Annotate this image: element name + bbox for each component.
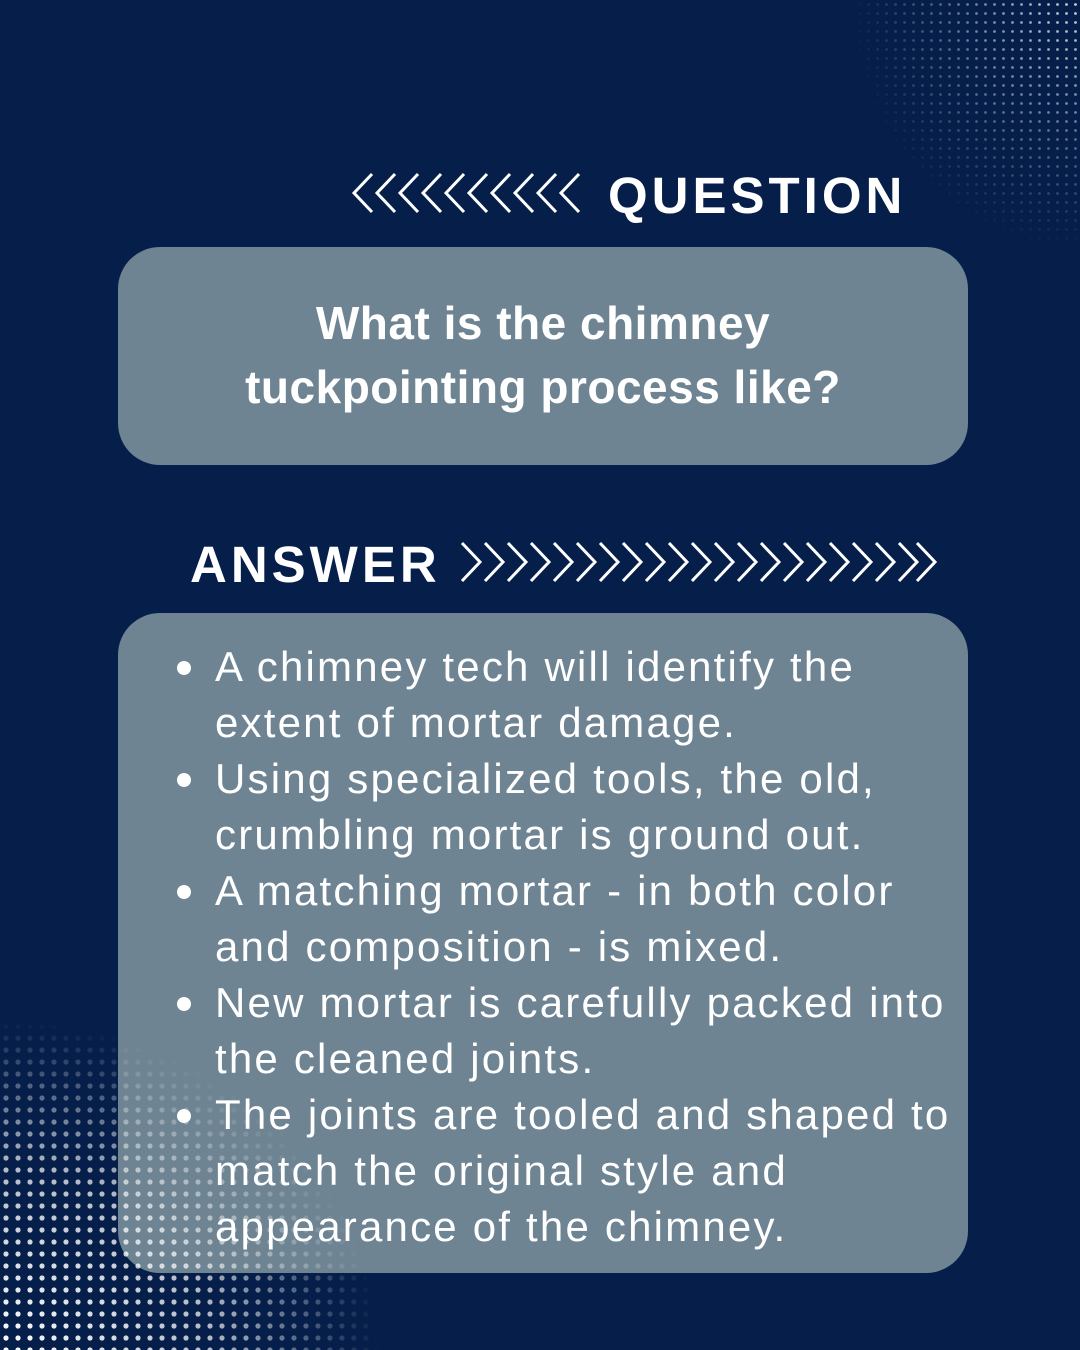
panel: question [118,247,968,465]
answer list: extent of mortar damage. [215,699,737,746]
answer list: Using specialized tools, the old, [215,755,876,802]
answer list: crumbling mortar is ground out. [215,811,864,858]
answer list: and composition - is mixed. [215,923,783,970]
answer heading: ANSWER [190,536,441,593]
question text: What is the chimney [316,297,770,349]
answer heading [190,536,937,593]
answer list: appearance of the chimney. [215,1203,787,1250]
answer list: match the original style and [215,1147,788,1194]
question heading: QUESTION [608,167,906,224]
answer list: New mortar is carefully packed into [215,979,946,1026]
question text: tuckpointing process like? [245,361,841,413]
answer list: the cleaned joints. [215,1035,595,1082]
answer list: A chimney tech will identify the [215,643,855,690]
answer list: The joints are tooled and shaped to [215,1091,950,1138]
panel: answer [118,613,968,1273]
halftone decoration bottom left [3,1028,368,1350]
question heading [352,167,906,224]
halftone decoration top right [867,3,1077,238]
answer list [177,643,950,1250]
answer list: A matching mortar - in both color [215,867,895,914]
question text [245,297,841,413]
